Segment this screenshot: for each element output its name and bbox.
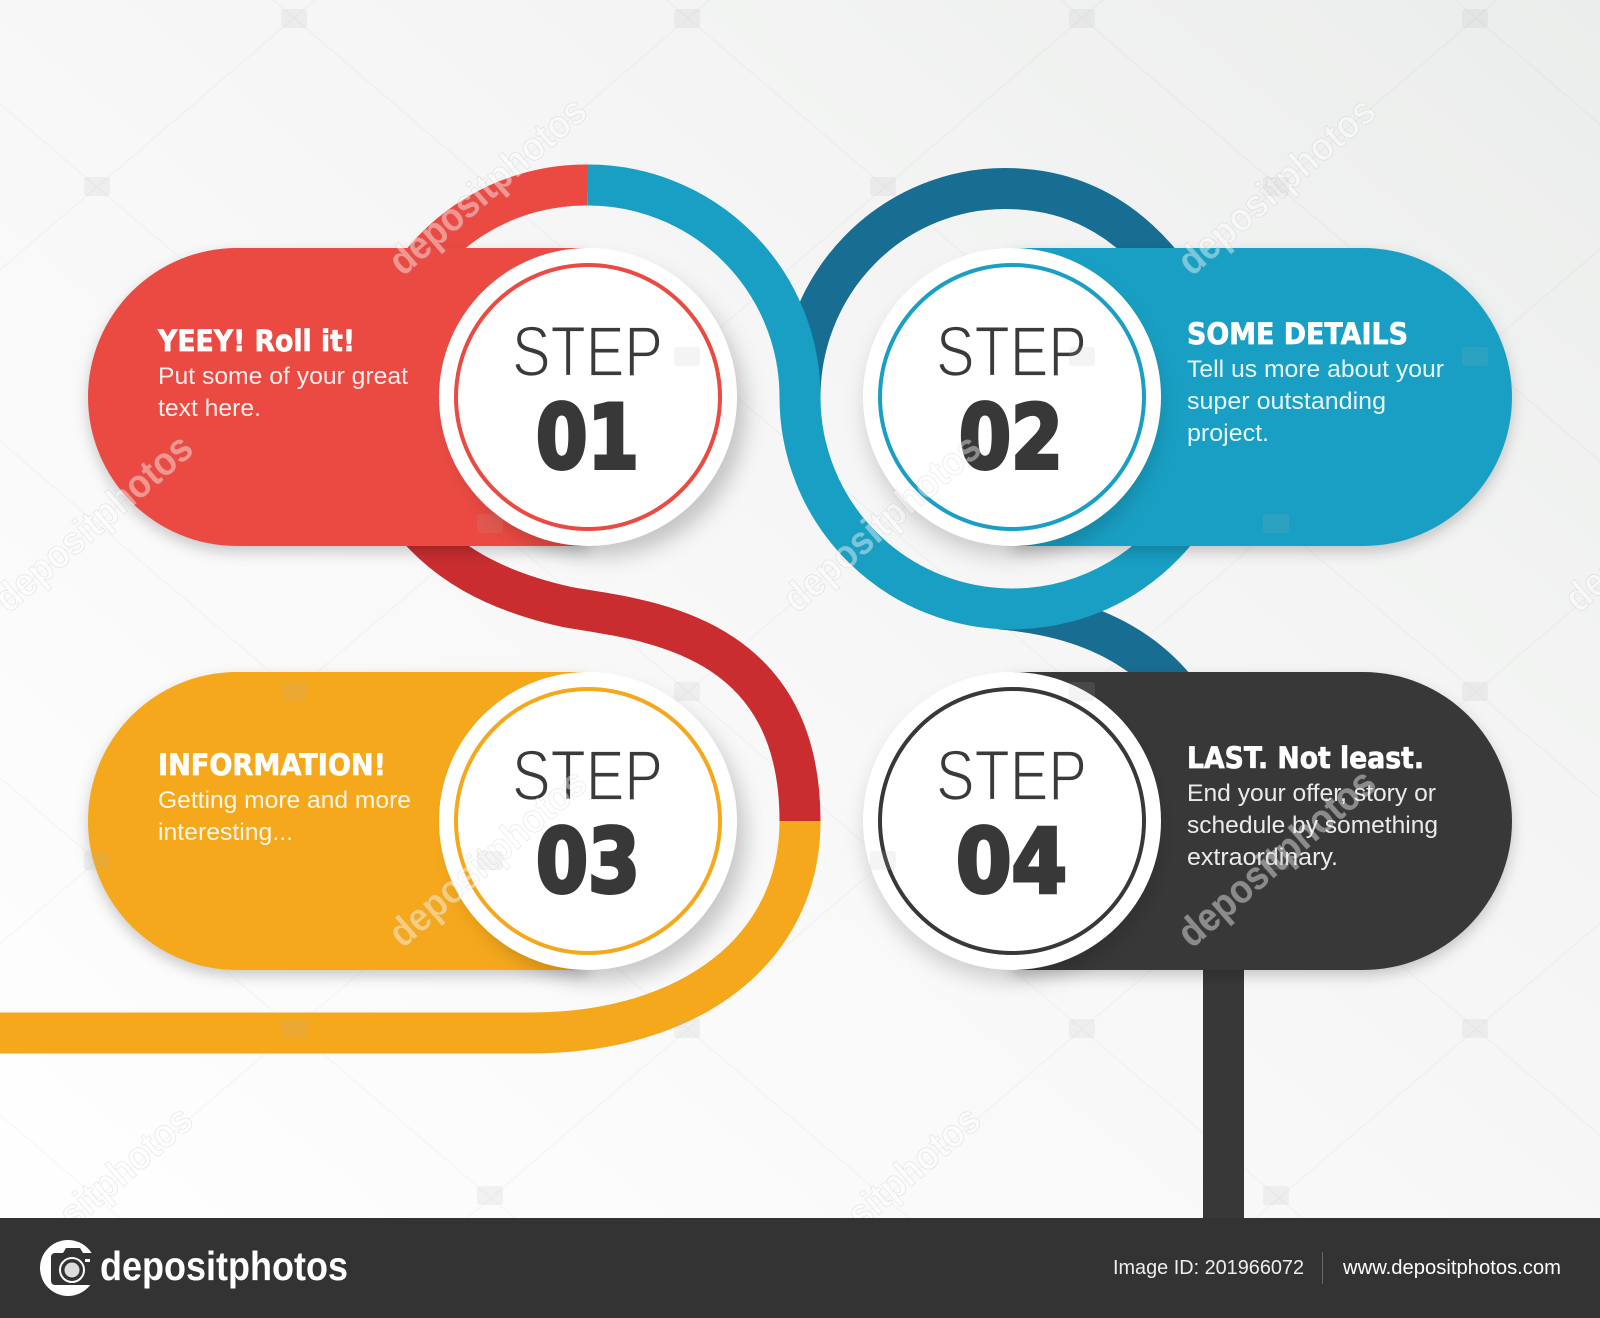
text: step 03 description: Getting more and more — [158, 787, 411, 814]
ribbon: blue path around step 01 and step 02 — [588, 185, 1197, 609]
pill: step 03 — [88, 672, 588, 970]
badge: step 01: STEP — [512, 313, 663, 392]
text: step 02 description — [1187, 317, 1444, 447]
badge: step 04: STEP — [936, 737, 1087, 816]
badge: step 03 — [439, 672, 737, 970]
badge: step 02: 02 — [959, 386, 1063, 489]
text: step 02 description: SOME DETAILS — [1187, 317, 1408, 351]
badge: step 03: 03 — [536, 810, 640, 913]
ribbon: dark red path from step 01 to step 03 — [400, 505, 800, 821]
watermarks: depositphotos — [380, 89, 595, 284]
text: step 02 description: super outstanding — [1187, 388, 1386, 415]
text: step 04 description — [1187, 741, 1438, 871]
icon: camera logo — [40, 1240, 96, 1296]
watermarks: depositphotos — [774, 1098, 989, 1293]
watermarks: depositphotos — [774, 426, 989, 621]
text: step 01 description: Put some of your great — [158, 363, 408, 390]
text: step 02 description: Tell us more about your — [1187, 356, 1444, 383]
stem below step 04 — [1203, 960, 1244, 1220]
text: step 04 description: extraordinary. — [1187, 844, 1338, 871]
panel: step 04 — [863, 672, 1512, 981]
text: step 04 description: LAST. Not least. — [1187, 741, 1424, 775]
panel: step 02 — [863, 248, 1512, 557]
text: step 04 description: schedule by something — [1187, 812, 1438, 839]
badge: step 02 — [863, 248, 1161, 546]
text: step 04 description: End your offer, story or — [1187, 780, 1436, 807]
footer website: www.depositphotos.com — [1342, 1257, 1561, 1279]
text: step 01 description: text here. — [158, 395, 261, 422]
text: step 01 description: YEEY! Roll it! — [157, 324, 355, 358]
ribbon: red arc above step 01 — [400, 185, 588, 295]
badge: step 03: STEP — [512, 737, 663, 816]
watermarks: depositphotos — [1169, 761, 1384, 956]
panel: step 03 — [88, 672, 746, 981]
panel: step 01 — [88, 248, 746, 557]
text: step 03 description: interesting... — [158, 819, 293, 846]
text: step 03 description: INFORMATION! — [158, 748, 386, 782]
footer logo text: depositphotos — [100, 1243, 348, 1289]
ribbon: dark blue link from step 02 to step 04 — [1000, 609, 1175, 688]
badge: step 01: 01 — [536, 386, 639, 489]
watermark camera marks — [84, 9, 1488, 1205]
ribbon: yellow path from step 03 to the left edge — [0, 821, 800, 1033]
watermarks: depositphotos — [380, 761, 595, 956]
badge: step 02: STEP — [936, 313, 1087, 392]
badge: step 04 — [863, 672, 1161, 970]
footer image id: Image ID: 201966072 — [1113, 1257, 1304, 1279]
ribbon: dark blue arc behind step 02 — [800, 188, 1170, 397]
text: step 03 description — [158, 748, 411, 846]
pill: step 04 — [1012, 672, 1512, 970]
badge: step 01 — [439, 248, 737, 546]
text: step 02 description: project. — [1187, 420, 1269, 447]
watermarks: depositphotos — [1169, 89, 1384, 284]
pill: step 02 — [1012, 248, 1512, 546]
text: step 01 description — [157, 324, 408, 422]
footer bar — [0, 1218, 1600, 1318]
pill: step 01 — [88, 248, 588, 546]
badge: step 04: 04 — [956, 810, 1067, 913]
